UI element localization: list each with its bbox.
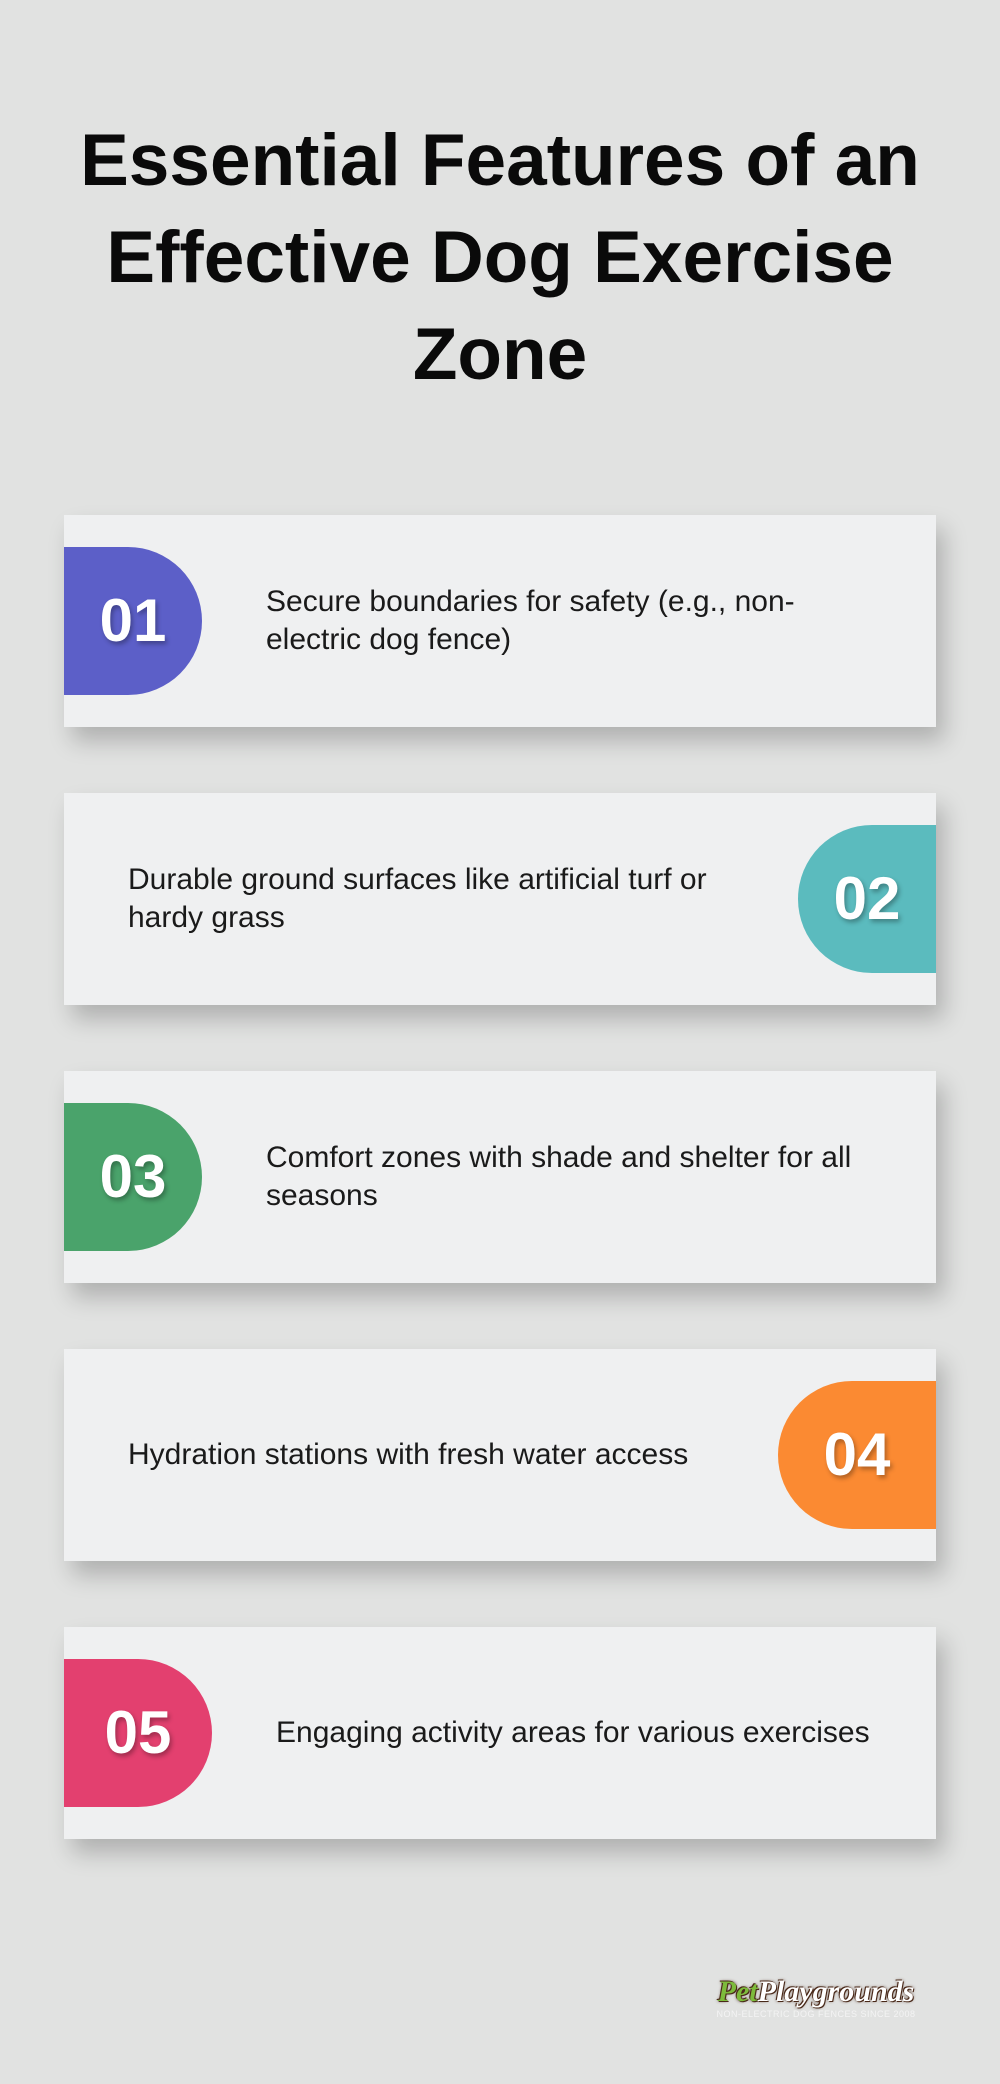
text 4: Hydration stations with fresh water access bbox=[128, 1438, 688, 1471]
badge 04: 04 bbox=[824, 1421, 890, 1488]
badge 05: 05 bbox=[105, 1699, 171, 1766]
card 1 bbox=[64, 515, 936, 727]
badge 03: 03 bbox=[100, 1143, 166, 1210]
card 2 bbox=[64, 793, 936, 1005]
text 2: Durable ground surfaces like artificial turf or hardy grass bbox=[128, 863, 707, 934]
badge 04 bbox=[778, 1381, 936, 1529]
logo: PetPlaygrounds bbox=[718, 1975, 914, 2008]
badge 01: 01 bbox=[100, 587, 166, 654]
badge 02: 02 bbox=[834, 865, 900, 932]
card 4 bbox=[64, 1349, 936, 1561]
badge 05 bbox=[64, 1659, 212, 1807]
title bbox=[80, 120, 920, 395]
title: Essential Features of an bbox=[80, 120, 920, 201]
badge 03 bbox=[64, 1103, 202, 1251]
card 5 bbox=[64, 1627, 936, 1839]
text 3: Comfort zones with shade and shelter for all seasons bbox=[266, 1141, 851, 1212]
title: Zone bbox=[413, 314, 587, 395]
text 1: Secure boundaries for safety (e.g., non-electric dog fence) bbox=[266, 585, 795, 656]
text 5: Engaging activity areas for various exercises bbox=[276, 1716, 870, 1749]
card 3 bbox=[64, 1071, 936, 1283]
logo: NON-ELECTRIC DOG FENCES SINCE 2008 bbox=[716, 2009, 916, 2019]
badge 02 bbox=[798, 825, 936, 973]
title: Effective Dog Exercise bbox=[106, 217, 894, 298]
badge 01 bbox=[64, 547, 202, 695]
